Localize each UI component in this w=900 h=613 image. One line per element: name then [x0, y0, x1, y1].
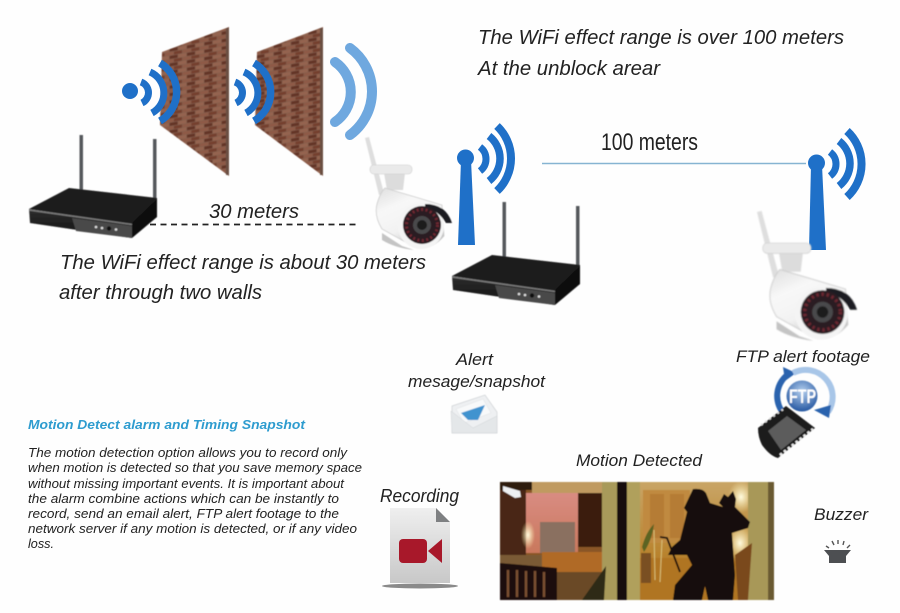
text block: motion detection description: loss. [28, 537, 54, 551]
icon: buzzer [824, 540, 851, 563]
label: 30 meters: 30 meters [209, 201, 299, 223]
label: motion detected: Motion Detected [576, 451, 703, 470]
label: buzzer: Buzzer [814, 505, 869, 524]
text block: motion detection description: record, send an email alert, FTP alert footage to the [28, 507, 339, 521]
text block: motion detection description: when motion is detected so that you save memory space [28, 461, 362, 475]
icon: antenna signal right [808, 131, 862, 250]
heading: motion detect: Motion Detect alarm and Timing Snapshot [28, 417, 306, 432]
text: 100 meter range [476, 26, 844, 80]
text: 30 meter range: after through two walls [59, 281, 262, 304]
text block: motion detection description: the alarm combine actions which can be instantly to [28, 492, 339, 506]
text block: motion detection description: network server if any motion is detected, or if any video [28, 522, 357, 536]
icon: antenna signal centre [457, 126, 511, 245]
label: 100 meters: 100 meters [601, 129, 698, 156]
text: 100 meter range: The WiFi effect range is over 100 meters [478, 26, 844, 49]
label: alert message: mesage/snapshot [408, 372, 546, 391]
text: 100 meter range: At the unblock arear [476, 57, 661, 80]
text: 30 meter range: The WiFi effect range is about 30 meters [60, 251, 426, 274]
icon: envelope with snapshot [451, 395, 497, 433]
icon: wifi signal through first wall [122, 63, 177, 121]
icon: video file [382, 508, 458, 588]
text block: motion detection description: The motion detection option allows you to record only [28, 446, 348, 460]
photo: burglar in house [500, 481, 774, 600]
camera right [757, 211, 857, 341]
label: FTP alert footage: FTP alert footage [736, 347, 870, 366]
brick wall 1 [160, 27, 229, 176]
line: 100 meters [542, 162, 806, 164]
icon: wifi signal through second wall [235, 63, 271, 121]
brick wall 2 [255, 27, 323, 176]
camera left [365, 137, 452, 250]
label: alert message [408, 350, 546, 391]
router left [29, 135, 157, 238]
label: recording: Recording [380, 486, 459, 506]
label: alert message: Alert [455, 350, 494, 369]
text: 30 meter range [59, 251, 426, 304]
icon: weakened wifi signal [335, 48, 372, 135]
router centre [452, 202, 580, 305]
dashed line: 30 meters [150, 224, 359, 226]
text block: motion detection description [28, 446, 362, 551]
icon: FTP film reel [758, 367, 833, 458]
icon: FTP film reel: FTP [789, 387, 816, 408]
text block: motion detection description: without missing important events. It is important about [28, 477, 345, 491]
